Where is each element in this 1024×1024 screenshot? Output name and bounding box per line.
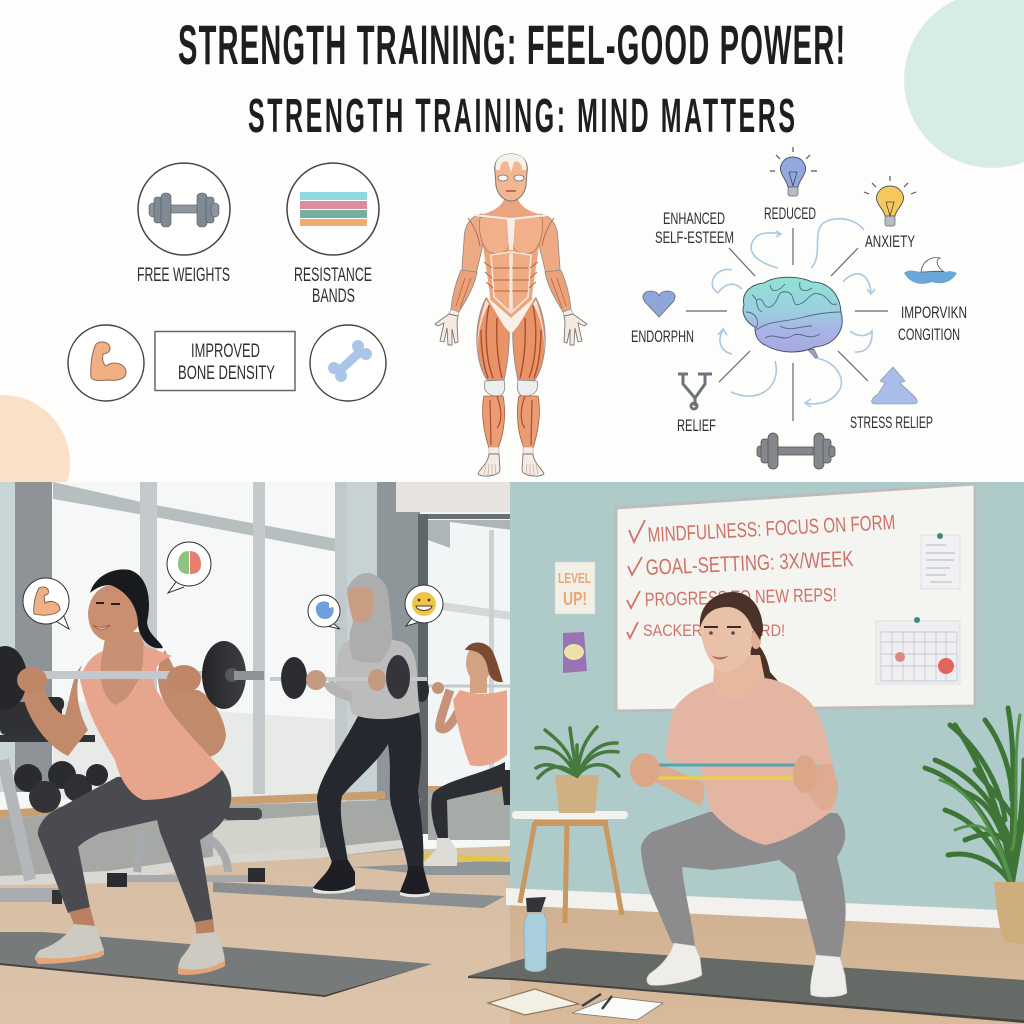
icon: heart [643,291,675,317]
icon: bone [310,325,386,401]
handwriting: progress: PROGRESS TO NEW REPS! [645,585,837,611]
whiteboard with goals [616,484,975,711]
arms [648,762,704,806]
label: anxiety: ANXIETY [865,232,915,251]
t-shirt [665,678,837,845]
icon: bubble flexed arm [23,578,69,629]
resistance bands [655,764,796,766]
icon: resistance bands [287,163,379,255]
barbell [7,671,263,679]
mirror [396,482,512,840]
label: enhanced self-esteem: SELF-ESTEEM [655,228,734,247]
decorative peach circle lower left [0,395,70,482]
pinned note [921,533,960,589]
neck [713,655,765,700]
home floor [510,900,1024,1024]
handwriting: sacker: SACKER TO BOARD! [643,621,785,640]
water bottle [524,897,547,972]
subtitle: STRENGTH TRAINING: MIND MATTERS [248,89,795,143]
exercise mats gym [0,853,512,997]
anatomical muscle figure [435,154,587,476]
baseboard [506,888,1000,928]
callout: improved bone density: IMPROVED [191,341,260,362]
curved arrows [712,219,875,407]
icon: yellow light bulb [864,176,916,226]
label: endorphin: ENDORPHN [631,327,694,346]
poster: level up: UP! [563,589,587,609]
icon: dumbbell [757,433,835,469]
label: stress relief: STRESS RELIEP [850,413,933,432]
icon: flexed muscle [68,325,144,401]
label: free weights: FREE WEIGHTS [137,265,230,286]
baseboard gym [0,838,420,885]
leggings [38,770,231,923]
window sill [0,791,385,818]
icon: brain [743,277,842,358]
label: improving cognition [898,303,967,344]
wall below window [0,799,420,882]
figure: woman with resistance band [630,592,847,997]
handwriting: mindfulness: MINDFULNESS: FOCUS ON FORM [647,511,896,547]
shoes [647,943,702,985]
label: enhanced self-esteem [655,209,734,247]
exercise mat right [468,948,1024,1023]
icon: relief symbol [678,374,712,409]
label: relief: RELIEF [677,416,716,435]
label: resistance bands [294,265,372,307]
icon: bubble blue brain [308,595,340,629]
label: resistance bands: BANDS [312,286,355,307]
radiator [213,815,320,858]
brain connector lines [686,228,888,421]
head [700,607,753,672]
head [88,584,140,640]
label: improving cognition: CONGITION [898,325,960,344]
label: improving cognition: IMPORVIKN [901,303,967,322]
photo panel: home scene [468,482,1024,1024]
label: resistance bands: RESISTANCE [294,265,372,286]
poster: level up: LEVEL [558,570,591,587]
gym wall columns [0,482,420,812]
windows [0,482,512,882]
icon: free weights [138,163,230,255]
wall sticker [563,632,587,673]
callout: improved bone density: BONE DENSITY [178,363,275,384]
label: reduced: REDUCED [764,204,816,223]
icon: bubble smile [405,585,443,626]
dumbbell rack and bench [0,697,265,904]
figure: woman squatting with barbell [0,542,264,975]
poster: level up [555,562,595,614]
icon: wave [904,258,957,284]
figure: woman in hijab with barbell [270,573,443,897]
icon: blue peak [872,367,917,404]
title: STRENGTH TRAINING: FEEL-GOOD POWER! [178,15,845,77]
label: enhanced self-esteem: ENHANCED [663,209,725,228]
pinned calendar [876,617,960,684]
upper body skin [22,665,88,756]
icon: bubble brain [167,542,211,593]
panel: equipment and bone benefits [68,163,386,401]
photo panel: gym scene [0,482,512,1024]
icon: blue light bulb [770,147,817,196]
hands [630,753,660,787]
large plant right [925,708,1024,944]
decorative teal circle top right [904,0,1024,168]
gym floor [0,846,512,1024]
notebook and pen [488,989,663,1020]
handwriting: goal-setting: GOAL-SETTING: 3X/WEEK [645,546,854,580]
panel: mind matters brain diagram [631,147,967,469]
teal wall [510,482,1024,932]
side table with plant [512,727,628,923]
leggings [641,812,846,960]
ponytail [750,640,778,681]
ankles [69,907,96,930]
callout: improved bone density [155,332,295,390]
figure: woman in mirror [415,642,510,866]
tank top [80,645,222,800]
shoes [35,924,104,962]
